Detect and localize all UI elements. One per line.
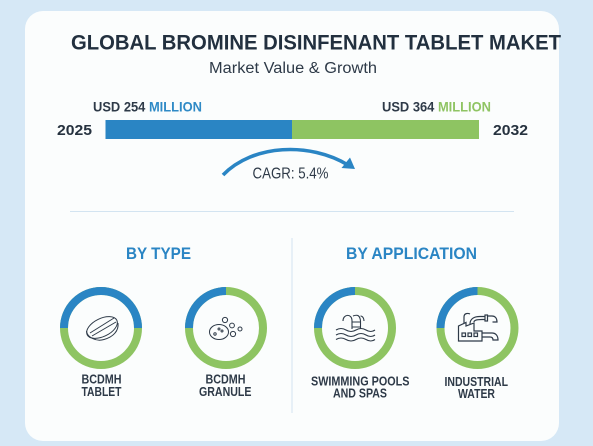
- divider: [70, 211, 514, 212]
- label: pools: SWIMMING POOLS: [311, 374, 410, 388]
- label: tablet: BCDMH: [82, 372, 122, 386]
- bar: 2032 segment: [292, 120, 479, 139]
- label: granule: GRANULE: [199, 385, 252, 399]
- label: industrial: [444, 375, 508, 401]
- title: GLOBAL BROMINE DISINFENANT TABLET MAKET: [71, 30, 561, 54]
- CAGR label: CAGR: 5.4%: [252, 166, 329, 182]
- heading: by type: BY TYPE: [126, 245, 191, 263]
- arrow: CAGR growth: [223, 149, 355, 175]
- label: tablet: [82, 372, 122, 399]
- label: 2025: 2025: [57, 123, 92, 139]
- subtitle: Market Value & Growth: [209, 60, 377, 77]
- ring: granule: [189, 291, 263, 365]
- label: industrial: WATER: [458, 387, 495, 401]
- label: granule: [199, 372, 252, 399]
- label: 2032 value: USD 364 MILLION: [382, 100, 491, 114]
- label: pools: AND SPAS: [333, 386, 387, 400]
- item: industrial water: [440, 291, 514, 401]
- icon: tablet: [83, 312, 121, 343]
- market value chart: [57, 100, 528, 139]
- icon: granules: [210, 317, 242, 340]
- icon: pool ladder and waves: [336, 315, 375, 341]
- ring: pools: [318, 291, 392, 365]
- label: 2032: 2032: [493, 123, 528, 139]
- label: tablet: TABLET: [82, 385, 122, 399]
- bar: 2025 segment: [106, 120, 292, 139]
- label: 2025 value: USD 254 MILLION: [93, 100, 202, 114]
- icon: factory and pipes: [458, 313, 498, 341]
- heading: by application: BY APPLICATION: [346, 245, 477, 263]
- label: industrial: INDUSTRIAL: [444, 375, 508, 389]
- label: granule: BCDMH: [206, 372, 246, 386]
- item: swimming pools: [311, 291, 410, 400]
- ring: industrial: [440, 291, 514, 365]
- item: BCDMH tablet: [64, 291, 138, 399]
- label: pools: [311, 374, 410, 400]
- item: BCDMH granule: [189, 291, 263, 399]
- ring: tablet: [64, 291, 138, 365]
- divider: [292, 238, 293, 413]
